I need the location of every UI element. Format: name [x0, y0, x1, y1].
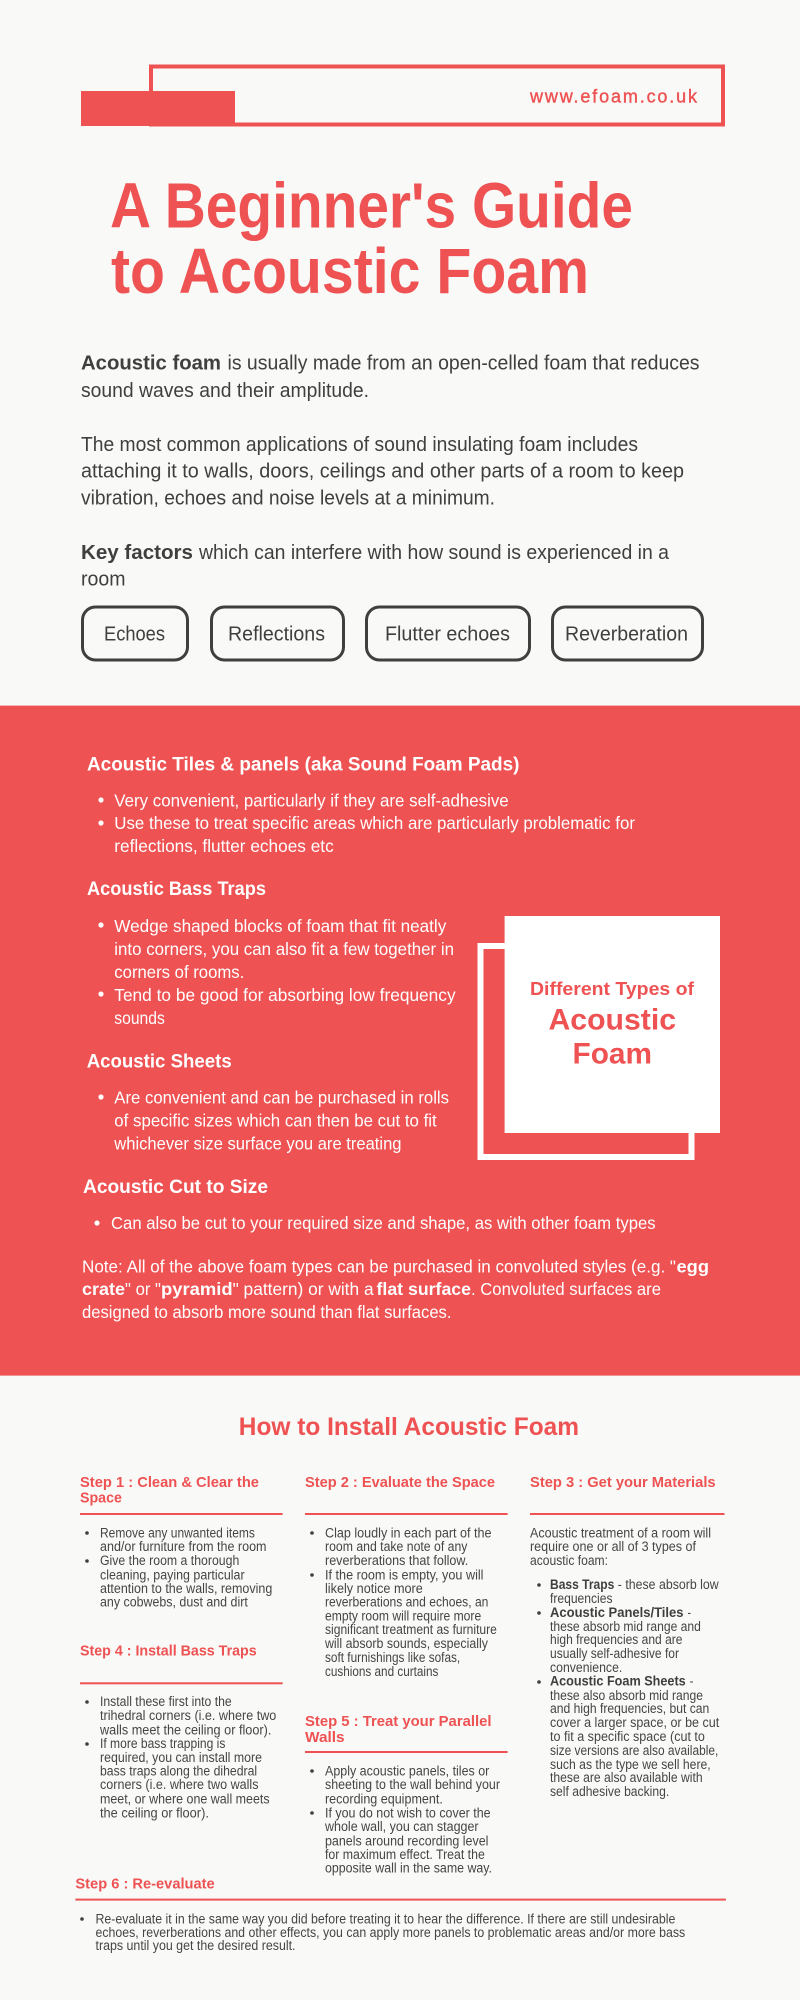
step 3: frequencies	[550, 1591, 613, 1606]
step 3: these also absorb mid range	[550, 1688, 703, 1703]
step 3: cover a larger space, or be cut	[550, 1715, 719, 1730]
applications paragraph: The most common applications of sound insulating foam includes	[81, 434, 638, 456]
step 3: and high frequencies, but can	[550, 1701, 709, 1716]
step 2: reverberations and echoes, an	[325, 1595, 488, 1610]
bass traps section	[87, 879, 456, 1028]
step 5: whole wall, you can stagger	[324, 1819, 479, 1834]
key factors paragraph	[81, 542, 670, 591]
step 6: traps until you get the desired result.	[96, 1938, 296, 1953]
step 3: Acoustic treatment of a room will	[530, 1525, 711, 1540]
step 5: opposite wall in the same way.	[325, 1861, 492, 1876]
step 6: Step 6 : Re-evaluate	[75, 1876, 215, 1892]
step 2: reverberations that follow.	[325, 1553, 468, 1568]
step 4: corners (i.e. where two walls	[100, 1777, 259, 1792]
applications paragraph: attaching it to walls, doors, ceilings and other parts of a room to keep	[81, 461, 684, 483]
step 2: will absorb sounds, especially	[324, 1636, 488, 1651]
applications paragraph	[81, 434, 684, 510]
step 3: Acoustic Panels/Tiles	[550, 1605, 684, 1620]
step 3: Step 3 : Get your Materials	[530, 1474, 716, 1491]
step 2: significant treatment as furniture	[325, 1622, 497, 1637]
intro paragraph	[81, 353, 700, 402]
step 1: attention to the walls, removing	[100, 1581, 272, 1596]
panel: foam types	[0, 706, 800, 1376]
key factor pills	[82, 607, 702, 660]
title: A Beginner's Guide	[110, 170, 633, 242]
step 2	[305, 1474, 508, 1679]
callout: different types of acoustic foam	[480, 916, 720, 1157]
step 5: If you do not wish to cover the	[325, 1805, 491, 1820]
note: " pattern) or with a	[233, 1279, 374, 1299]
pill: echoes: Echoes	[104, 624, 165, 646]
step 2: room and take note of any	[325, 1539, 468, 1554]
key factors paragraph: room	[81, 569, 126, 591]
step 1: Space	[80, 1490, 122, 1507]
step 3: require one or all of 3 types of	[530, 1539, 696, 1554]
step 4: bass traps along the dihedral	[100, 1763, 257, 1778]
step 5: Apply acoustic panels, tiles or	[325, 1763, 490, 1778]
step 3: size versions are also available,	[550, 1743, 718, 1758]
acoustic sheets section: of specific sizes which can then be cut to fit	[114, 1110, 437, 1130]
note: flat surface	[376, 1279, 471, 1299]
step 4	[80, 1643, 283, 1820]
step 1: any cobwebs, dust and dirt	[100, 1595, 248, 1610]
acoustic sheets section: whichever size surface you are treating	[113, 1133, 401, 1153]
step 5: Step 5 : Treat your Parallel	[305, 1713, 492, 1730]
intro paragraph: is usually made from an open-celled foam that reduces	[228, 353, 700, 375]
cut to size section: Acoustic Cut to Size	[83, 1177, 268, 1198]
step 4: the ceiling or floor).	[100, 1805, 209, 1820]
intro paragraph: sound waves and their amplitude.	[81, 380, 369, 402]
note: Note: All of the above foam types can be purchased in convoluted styles (e.g. "	[82, 1256, 676, 1276]
pill: reverberation: Reverberation	[565, 624, 688, 646]
step 2: soft furnishings like sofas,	[325, 1650, 460, 1665]
bass traps section: into corners, you can also fit a few together in	[114, 939, 454, 959]
title	[110, 170, 633, 307]
step 3: these are also available with	[550, 1770, 703, 1785]
step 3	[530, 1474, 724, 1799]
note: " or "	[125, 1279, 161, 1299]
solid red tab	[81, 91, 235, 126]
pill: reflections: Reflections	[228, 624, 325, 646]
callout: different types of acoustic foam: Different Types of	[530, 978, 695, 999]
step 4: walls meet the ceiling or floor).	[99, 1722, 271, 1737]
acoustic sheets section	[87, 1051, 449, 1153]
step 4: If more bass trapping is	[100, 1736, 226, 1751]
header banner	[81, 66, 723, 126]
heading: how to install: How to Install Acoustic Foam	[239, 1413, 579, 1441]
step 2: likely notice more	[325, 1581, 423, 1596]
pill: echoes	[82, 607, 188, 660]
note: crate	[82, 1279, 125, 1299]
step 6: echoes, reverberations and other effects, you can apply more panels to problematic areas and/or more bass	[96, 1925, 685, 1940]
step 1: and/or furniture from the room	[100, 1539, 266, 1554]
step 4: meet, or where one wall meets	[100, 1792, 270, 1806]
note: egg	[676, 1256, 709, 1276]
cut to size section: Can also be cut to your required size and shape, as with other foam types	[111, 1213, 656, 1233]
acoustic tiles section: reflections, flutter echoes etc	[114, 836, 334, 856]
step 6	[75, 1876, 726, 1953]
step 5: Walls	[305, 1729, 345, 1746]
website url: www.efoam.co.uk	[529, 87, 698, 107]
note: . Convoluted surfaces are	[471, 1279, 661, 1299]
acoustic sheets section: Are convenient and can be purchased in rolls	[114, 1087, 449, 1107]
key factors paragraph: Key factors	[81, 542, 193, 564]
step 5: recording equipment.	[325, 1792, 443, 1806]
step 1: Step 1 : Clean & Clear the	[80, 1474, 259, 1491]
bass traps section: corners of rooms.	[114, 962, 244, 982]
bass traps section: Acoustic Bass Traps	[87, 879, 266, 900]
step 4: trihedral corners (i.e. where two	[100, 1708, 276, 1723]
key factors paragraph: which can interfere with how sound is experienced in a	[198, 542, 670, 564]
step 1	[80, 1474, 283, 1610]
step 5	[305, 1713, 508, 1876]
step 3: usually self-adhesive for	[550, 1646, 679, 1661]
note: pyramid	[161, 1279, 233, 1299]
step 3: Bass Traps	[550, 1577, 614, 1592]
bass traps section: Tend to be good for absorbing low frequency	[114, 985, 456, 1005]
title: to Acoustic Foam	[111, 235, 589, 307]
intro paragraph: Acoustic foam	[81, 353, 221, 375]
step 1: Give the room a thorough	[100, 1553, 239, 1568]
bass traps section: sounds	[114, 1008, 165, 1028]
callout: different types of acoustic foam: Acoustic	[548, 1004, 676, 1037]
step 3: -	[688, 1605, 691, 1620]
step 5: panels around recording level	[325, 1833, 488, 1848]
step 2: cushions and curtains	[325, 1664, 439, 1679]
step 3: these absorb mid range and	[550, 1619, 701, 1634]
step 3: to fit a specific space (cut to	[550, 1729, 705, 1744]
step 3: -	[690, 1674, 693, 1689]
bass traps section: Wedge shaped blocks of foam that fit neatly	[114, 916, 447, 936]
step 4: Step 4 : Install Bass Traps	[80, 1643, 257, 1660]
step 3: Acoustic Foam Sheets	[550, 1674, 686, 1689]
note	[82, 1256, 709, 1322]
step 3: self adhesive backing.	[550, 1784, 669, 1799]
step 1: cleaning, paying particular	[100, 1567, 245, 1582]
pill: reflections	[212, 607, 344, 660]
step 5: for maximum effect. Treat the	[325, 1847, 485, 1862]
step 2: If the room is empty, you will	[325, 1567, 484, 1582]
step 3: high frequencies and are	[550, 1632, 682, 1647]
step 3: - these absorb low	[618, 1577, 719, 1592]
step 2: Clap loudly in each part of the	[325, 1525, 492, 1540]
pill: flutter echoes	[366, 607, 530, 660]
acoustic sheets section: Acoustic Sheets	[87, 1051, 232, 1072]
pill: flutter echoes: Flutter echoes	[385, 624, 510, 646]
applications paragraph: vibration, echoes and noise levels at a minimum.	[81, 488, 495, 510]
step 2: empty room will require more	[325, 1608, 481, 1623]
acoustic tiles section: Very convenient, particularly if they are self-adhesive	[114, 790, 509, 810]
acoustic tiles section: Use these to treat specific areas which are particularly problematic for	[114, 813, 635, 833]
step 5: sheeting to the wall behind your	[325, 1777, 500, 1792]
step 1: Remove any unwanted items	[100, 1525, 255, 1540]
acoustic tiles section: Acoustic Tiles & panels (aka Sound Foam Pads)	[87, 754, 520, 775]
step 3: convenience.	[550, 1660, 622, 1675]
step 2: Step 2 : Evaluate the Space	[305, 1474, 495, 1491]
step 4: Install these first into the	[100, 1694, 232, 1709]
step 6: Re-evaluate it in the same way you did before treating it to hear the difference. If there are still undesirable	[96, 1911, 675, 1926]
callout: different types of acoustic foam: Foam	[572, 1037, 652, 1070]
note: designed to absorb more sound than flat surfaces.	[82, 1302, 452, 1322]
acoustic tiles section	[87, 754, 635, 856]
cut to size section	[83, 1177, 656, 1233]
step 3: acoustic foam:	[530, 1553, 608, 1568]
pill: reverberation	[552, 607, 702, 660]
step 3: such as the type we sell here,	[550, 1757, 711, 1772]
step 4: required, you can install more	[100, 1750, 262, 1765]
